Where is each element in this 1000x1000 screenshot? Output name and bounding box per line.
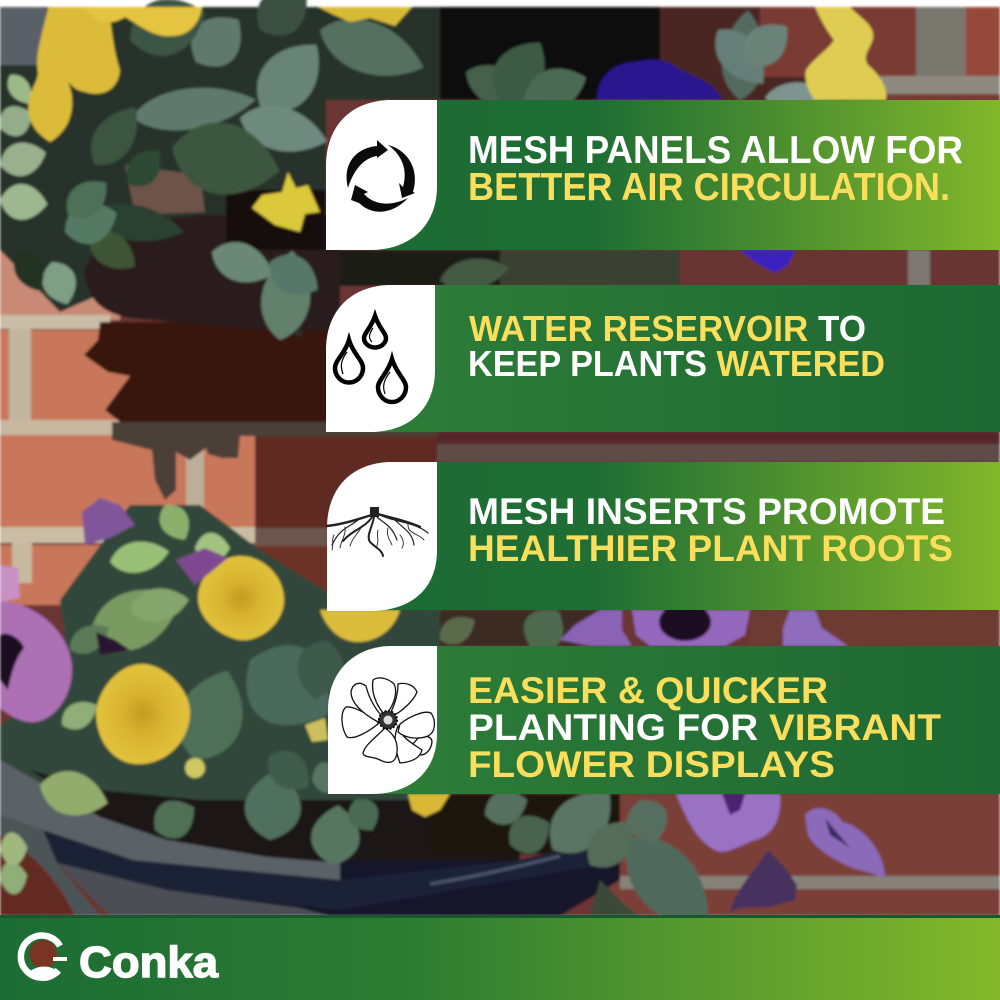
panel 3 text: HEALTHIER PLANT ROOTS bbox=[468, 528, 953, 569]
band flowers bbox=[560, 610, 632, 646]
panel 2: water reservoir bbox=[326, 285, 1000, 432]
band foliage bbox=[437, 253, 512, 295]
panel 3 white leaf tab bbox=[327, 462, 437, 611]
panel 4 green banner bbox=[380, 646, 1000, 794]
panel 2 green banner bbox=[380, 285, 1000, 432]
panel 4 text: EASIER & QUICKER bbox=[468, 670, 828, 711]
top right: brick, mortar bbox=[650, 7, 1000, 100]
blue sliver bbox=[740, 250, 795, 273]
right side wall bands bbox=[437, 432, 1000, 444]
icon: flower line drawing bbox=[342, 678, 434, 763]
shaded brick bbox=[84, 322, 440, 422]
panel 3 green banner bbox=[380, 462, 1000, 610]
logo mark bbox=[21, 936, 67, 981]
icon: plant roots bbox=[327, 507, 428, 556]
panel 4 text: FLOWER DISPLAYS bbox=[468, 744, 835, 785]
upper yellow flowers bbox=[28, 7, 120, 142]
lower yellow flowers bbox=[198, 556, 284, 640]
lower leaves bbox=[0, 253, 731, 950]
ground at lower left bbox=[0, 835, 75, 916]
lower foliage mass bbox=[0, 505, 440, 865]
panel 2 text: WATER RESERVOIR TO bbox=[469, 308, 866, 349]
logo wordmark: Conka bbox=[79, 938, 219, 987]
panel 3 text: MESH INSERTS PROMOTE bbox=[468, 491, 945, 532]
black planter top bbox=[430, 7, 660, 100]
gray stone bbox=[0, 7, 46, 65]
upper foliage dark mass bbox=[0, 7, 440, 338]
panel 3: healthier roots bbox=[327, 462, 1000, 611]
panel 4 white leaf tab bbox=[328, 646, 437, 794]
panel 3 text bbox=[468, 491, 953, 569]
panel 1 text bbox=[468, 129, 963, 209]
upper right foliage bbox=[458, 55, 542, 121]
top right yellow flower bbox=[805, 7, 886, 100]
panel 2 text bbox=[468, 308, 885, 384]
panel 2 white leaf tab bbox=[326, 285, 435, 432]
lower purple flowers bbox=[0, 602, 72, 722]
panel 4 text: PLANTING FOR VIBRANT bbox=[468, 707, 941, 748]
panel 1 green banner bbox=[380, 100, 1000, 250]
blue flower bbox=[597, 60, 722, 100]
icon: water drops bbox=[335, 316, 406, 402]
panel 2 text: KEEP PLANTS WATERED bbox=[468, 343, 885, 384]
panel 1 text: BETTER AIR CIRCULATION. bbox=[468, 166, 950, 209]
bottom right leaves bbox=[479, 784, 533, 831]
upper pot bbox=[84, 215, 340, 330]
panel 1 text: MESH PANELS ALLOW FOR bbox=[468, 129, 963, 172]
footer band bbox=[0, 915, 1000, 1000]
lower planter pot bbox=[57, 860, 620, 916]
panel 1: air circulation bbox=[326, 100, 1000, 250]
sunlit bricks left bbox=[0, 240, 120, 320]
panel 4 text bbox=[468, 670, 941, 785]
upper leaves bbox=[0, 0, 432, 343]
panel 1 white leaf tab bbox=[326, 100, 437, 250]
panel 4: vibrant flowers bbox=[328, 646, 1000, 794]
bottom right purple flowers bbox=[676, 794, 780, 852]
lower planter soil bbox=[30, 770, 520, 863]
icon: recycle arrows bbox=[347, 140, 415, 212]
